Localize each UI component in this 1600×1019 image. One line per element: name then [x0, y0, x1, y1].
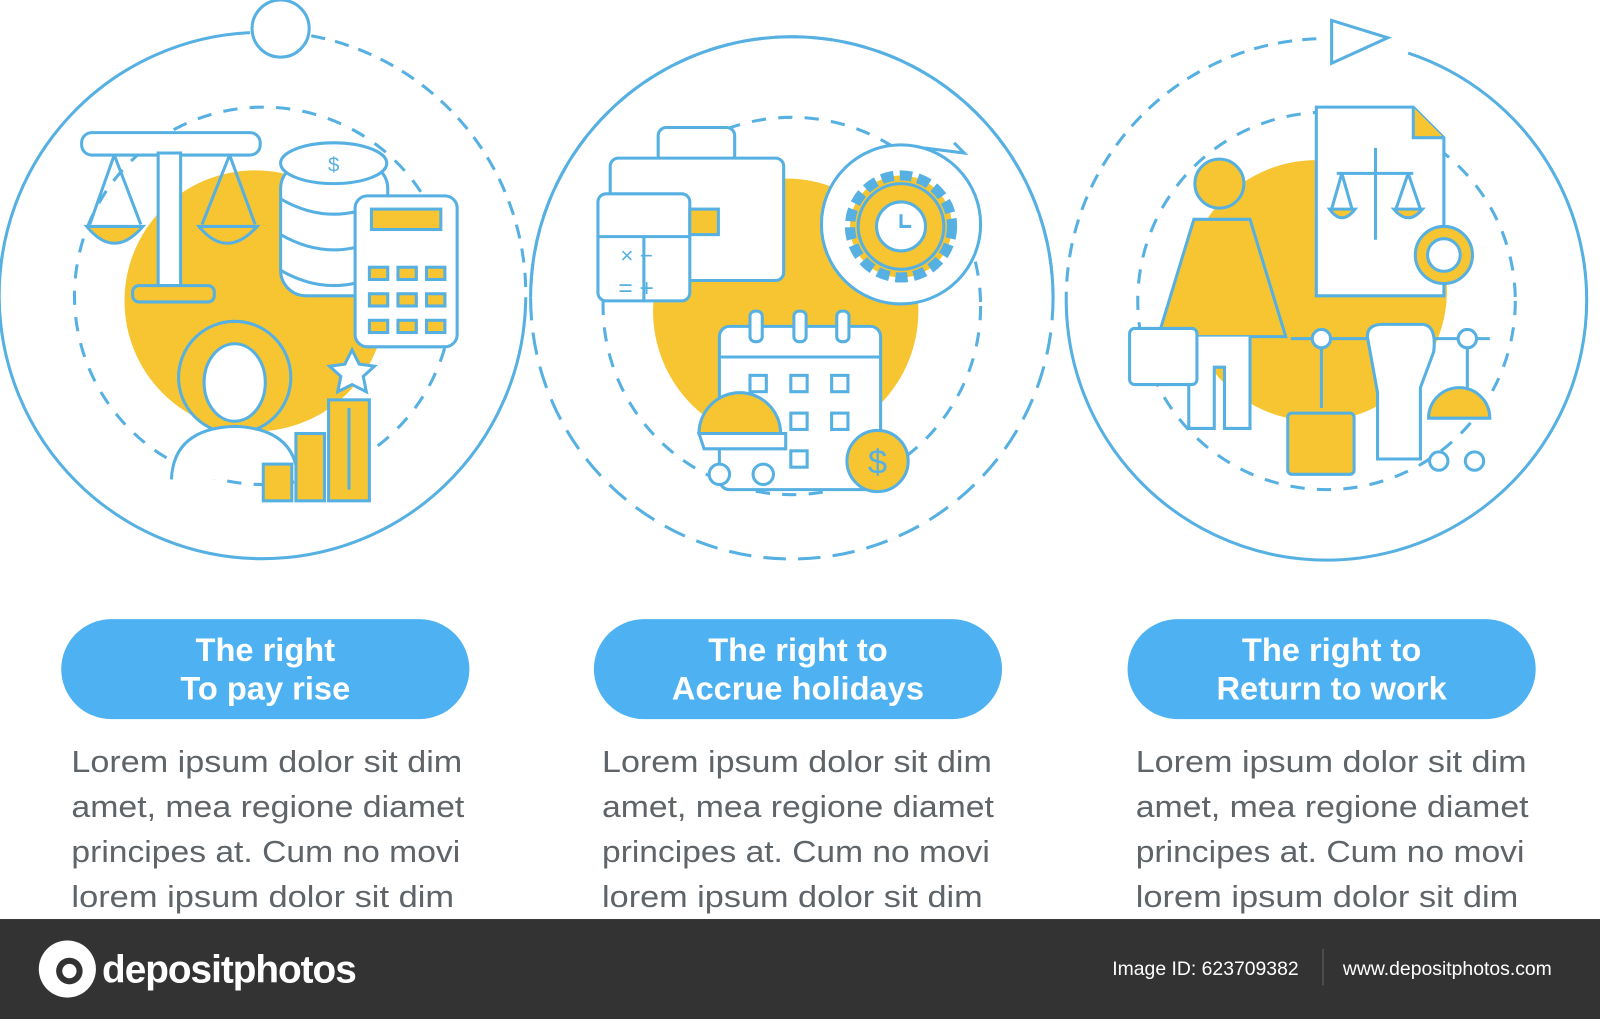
heading pill 3: Return to work — [1217, 670, 1448, 707]
outer circle 1 — [0, 0, 526, 559]
text block 2 — [602, 745, 994, 914]
icon: calculator — [355, 196, 457, 347]
icon: calendar with stroller: $ — [868, 443, 887, 481]
panel: pay rise — [0, 0, 526, 914]
heading pill 1: The right — [196, 631, 335, 668]
footer bar — [0, 919, 1600, 1019]
panel: return to work — [1066, 20, 1587, 914]
text block 3: lorem ipsum dolor sit dim — [1136, 880, 1518, 914]
text block 1: principes at. Cum no movi — [71, 835, 460, 869]
yellow blob 2 — [653, 179, 918, 444]
outer circle 2 — [531, 37, 1053, 559]
heading pill 3 — [1128, 619, 1536, 719]
text block 1: lorem ipsum dolor sit dim — [71, 880, 454, 914]
website: www.depositphotos.com — [1342, 958, 1552, 980]
text block 2: Lorem ipsum dolor sit dim — [602, 745, 992, 779]
outer circle 3 — [1066, 20, 1587, 560]
icon: logo camera — [39, 940, 96, 998]
image id: Image ID: 623709382 — [1112, 958, 1299, 980]
heading pill 1 — [61, 619, 469, 719]
icon: woman with briefcase — [1130, 159, 1286, 428]
text block 3: Lorem ipsum dolor sit dim — [1136, 745, 1527, 779]
heading pill 1: To pay rise — [180, 670, 350, 707]
yellow blob 3 — [1186, 160, 1447, 421]
icon: fist with connectors — [1288, 324, 1490, 474]
text block 2: lorem ipsum dolor sit dim — [602, 880, 983, 914]
text block 3: amet, mea regione diamet — [1136, 790, 1529, 824]
heading pill 2: The right to — [708, 631, 888, 668]
text block 1 — [71, 745, 465, 914]
icon: calendar with stroller — [699, 311, 908, 492]
text block 1: Lorem ipsum dolor sit dim — [71, 745, 462, 779]
text block 2: principes at. Cum no movi — [602, 835, 990, 869]
icon: gear clock — [821, 143, 981, 304]
text block 3: principes at. Cum no movi — [1136, 835, 1524, 869]
icon: woman with chart — [171, 321, 374, 501]
icon: scales — [82, 133, 260, 302]
heading pill 2: Accrue holidays — [672, 670, 924, 707]
icon: coins — [281, 143, 388, 296]
icon: briefcase — [598, 128, 784, 302]
heading pill 2 — [594, 619, 1002, 719]
icon: briefcase: × − — [620, 243, 653, 268]
text block 3 — [1136, 745, 1529, 914]
logo text: depositphotos — [102, 948, 356, 991]
yellow blob 1 — [124, 170, 386, 431]
text block 1: amet, mea regione diamet — [71, 790, 465, 824]
text block 2: amet, mea regione diamet — [602, 790, 994, 824]
panel: accrue holidays — [531, 37, 1053, 914]
icon: briefcase: = + — [618, 275, 654, 302]
icon: document with scales — [1316, 107, 1472, 296]
heading pill 3: The right to — [1242, 631, 1421, 668]
icon: coins: $ — [328, 154, 340, 176]
